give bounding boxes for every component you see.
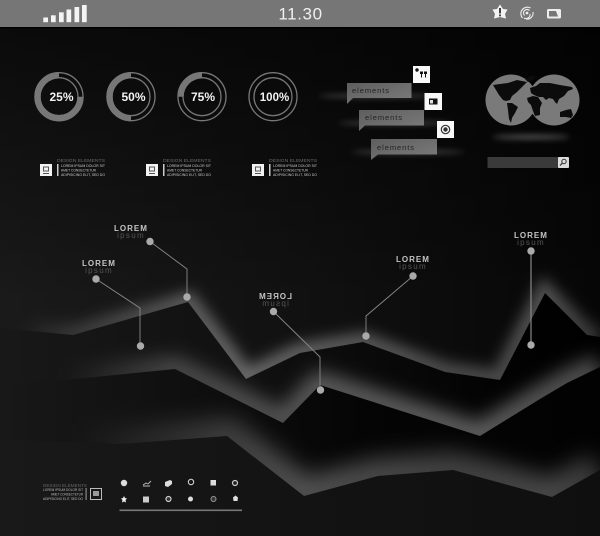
icon: chat: [165, 480, 172, 487]
text block: design elements 3: AMET CONSECTETUR: [273, 167, 308, 172]
callout 2: LOREM: [82, 259, 116, 268]
icon: record button: [232, 480, 238, 486]
speech bubble 2: [339, 110, 451, 131]
text block: design elements 2: [146, 158, 212, 177]
text block: design elements 1: [40, 158, 106, 177]
callout 3 mirrored: ipsum: [261, 299, 289, 308]
icon: people: [413, 66, 430, 83]
wave band 1: [36, 274, 600, 380]
signal strength bars: [43, 5, 87, 22]
progress ring 50%: [107, 73, 155, 121]
callout 4: [362, 255, 430, 340]
wave band 2: [86, 348, 600, 436]
text block: design elements bottom: [43, 483, 102, 501]
text block: design elements 2: DESIGN ELEMENTS: [163, 158, 211, 163]
speech bubble 1: [319, 83, 431, 104]
speech bubble 1: elements: [352, 86, 389, 95]
icon grid: [121, 479, 238, 502]
progress ring 75%: [178, 73, 226, 121]
icon: at sign: [211, 496, 216, 502]
text block: design elements bottom: AMET CONSECTETUR: [51, 492, 83, 496]
callout 2: ipsum: [85, 266, 113, 275]
divider under icon grid: [120, 510, 242, 511]
icon: gear: [188, 496, 193, 502]
callout 1: LOREM: [114, 224, 148, 233]
text block: design elements 3: DESIGN ELEMENTS: [269, 158, 317, 163]
icon: target: [437, 121, 454, 138]
text block: design elements 1: ADIPISICING ELIT, SED DO: [61, 172, 105, 177]
callout 4: ipsum: [399, 262, 427, 271]
icon: lightbulb: [188, 479, 194, 485]
text block: design elements 1: AMET CONSECTETUR: [61, 167, 96, 172]
callout 3 mirrored: LOREM: [258, 292, 292, 301]
label 75%: 75%: [191, 90, 215, 104]
callout 4: LOREM: [396, 255, 430, 264]
text block: design elements bottom: ADIPISICING ELIT, SED DO: [43, 496, 83, 501]
callout 5: [514, 231, 548, 349]
callout 1: ipsum: [117, 231, 145, 240]
speech bubble 3: elements: [377, 143, 414, 152]
icon: photo card: [424, 93, 442, 110]
text block: design elements bottom: LOREM IPSUM DOLOR SIT: [43, 487, 83, 492]
icon: flower: [233, 496, 238, 501]
top status bar: [0, 0, 600, 28]
callout 5: LOREM: [514, 231, 548, 240]
icon: alert star: [492, 4, 508, 18]
text block: design elements 3: [252, 158, 318, 177]
progress ring 100%: [249, 73, 297, 121]
text block: design elements 1: LOREM IPSUM DOLOR SIT: [61, 163, 106, 168]
icon: book: [210, 480, 216, 486]
label 100%: 100%: [260, 92, 289, 104]
text block: design elements 2: AMET CONSECTETUR: [167, 167, 202, 172]
speech bubble 2: elements: [365, 113, 402, 122]
text block: design elements 3: ADIPISICING ELIT, SED DO: [273, 172, 317, 177]
icon: wireless signal: [521, 7, 533, 19]
callout 1: [114, 224, 191, 301]
text block: design elements 2: ADIPISICING ELIT, SED DO: [167, 172, 211, 177]
callout 2: [82, 259, 144, 350]
icon: star: [121, 496, 127, 502]
text block: design elements bottom: DESIGN ELEMENTS: [43, 483, 87, 488]
search bar: [488, 157, 569, 168]
text block: design elements 2: LOREM IPSUM DOLOR SIT: [167, 163, 212, 168]
clock: 11.30: [278, 4, 323, 24]
text block: design elements 1: DESIGN ELEMENTS: [57, 158, 105, 163]
icon: battery: [547, 9, 561, 18]
label 50%: 50%: [121, 90, 146, 104]
icon: line chart: [143, 481, 151, 486]
icon: search button: [558, 157, 569, 168]
callout 3 mirrored: [258, 292, 324, 394]
label 25%: 25%: [49, 90, 74, 104]
icon: smiley: [121, 480, 127, 486]
world map globes: [486, 74, 580, 139]
speech bubble 3: [352, 139, 464, 160]
icon: ring badge: [166, 496, 171, 502]
progress ring 25%: [35, 73, 83, 121]
icon: calendar: [143, 496, 149, 502]
wave band 3: [0, 436, 600, 536]
text block: design elements 3: LOREM IPSUM DOLOR SIT: [273, 163, 318, 168]
callout 5: ipsum: [517, 238, 545, 247]
